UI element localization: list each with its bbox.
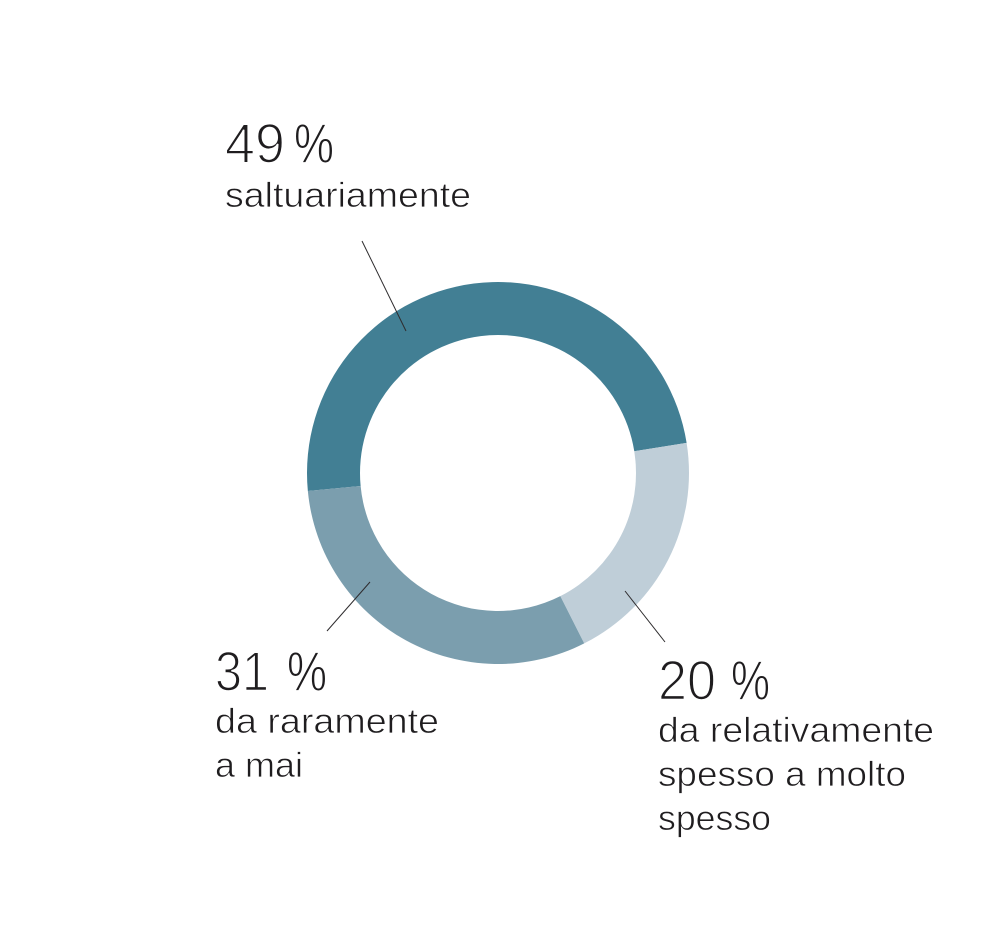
label: 49% saltuariamente: saltuariamente bbox=[225, 175, 471, 215]
label: 20% da relativamente spesso a molto spesso: % bbox=[731, 648, 770, 712]
label: 31% da raramente a mai bbox=[215, 640, 439, 785]
segment: 20% da relativamente spesso a molto spesso bbox=[560, 443, 689, 643]
label: 31% da raramente a mai: da raramente bbox=[215, 701, 439, 741]
leader line: 20% bbox=[625, 591, 665, 642]
label: 20% da relativamente spesso a molto spesso: spesso a molto bbox=[658, 754, 906, 794]
segment: 31% da raramente a mai bbox=[308, 486, 584, 664]
segment: 49% saltuariamente bbox=[307, 282, 687, 491]
label: 20% da relativamente spesso a molto spesso bbox=[658, 648, 934, 838]
leader line: 31% bbox=[327, 582, 370, 631]
label: 49% saltuariamente: % bbox=[294, 112, 334, 174]
label: 31% da raramente a mai: % bbox=[287, 640, 327, 702]
leader line: 49% bbox=[362, 241, 406, 331]
donut chart bbox=[307, 282, 689, 664]
label: 31% da raramente a mai: a mai bbox=[215, 745, 303, 785]
label: 20% da relativamente spesso a molto spesso: da relativamente bbox=[658, 710, 934, 750]
label: 49% saltuariamente: 49 bbox=[225, 112, 285, 174]
label: 31% da raramente a mai: 31 bbox=[215, 640, 269, 702]
label: 20% da relativamente spesso a molto spesso: spesso bbox=[658, 798, 771, 838]
label: 20% da relativamente spesso a molto spesso: 20 bbox=[658, 648, 716, 712]
label: 49% saltuariamente bbox=[225, 112, 471, 215]
